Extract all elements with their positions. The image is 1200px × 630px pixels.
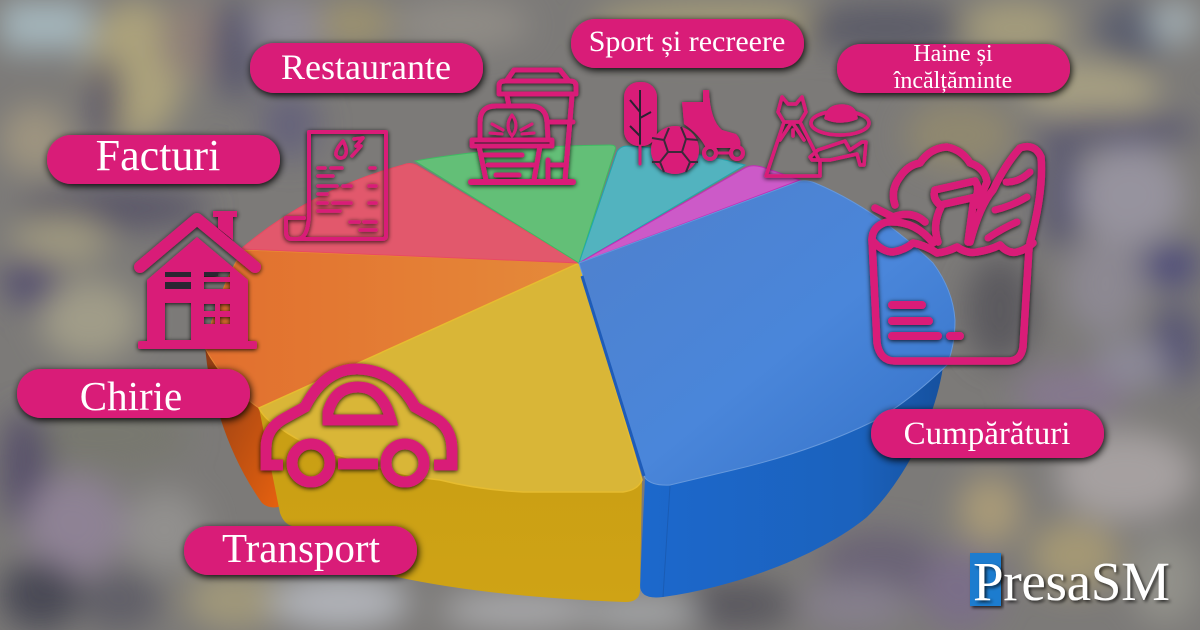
logo blue box (970, 553, 1001, 606)
pill: Haine și încălțăminte: Haine și (913, 41, 993, 67)
pill: Facturi: Facturi (96, 131, 220, 180)
red slice (241, 164, 579, 263)
pill: Haine și încălțăminte: încălțăminte (893, 68, 1012, 94)
blue slice (579, 181, 955, 485)
orange slice (205, 250, 579, 408)
blue side seam (663, 486, 670, 597)
pill: Sport și recreere: Sport și recreere (589, 25, 785, 58)
logo: PresaSM (970, 551, 1170, 612)
window shadows (165, 272, 218, 289)
orange slice side (205, 345, 282, 507)
icon: food and coffee (471, 70, 576, 182)
pill: Restaurante (250, 43, 483, 93)
icon: groceries (872, 147, 1042, 361)
icon: bill (286, 132, 386, 239)
walls with windows (147, 237, 248, 341)
chimney (213, 211, 237, 240)
magenta slice (579, 166, 800, 263)
yellow slice side (259, 408, 642, 602)
base (138, 341, 257, 349)
pill: Cumpărături (871, 409, 1104, 458)
yellow slice (259, 263, 642, 492)
roof (140, 219, 255, 267)
pill: Transport (184, 525, 417, 575)
pill: Sport și recreere (571, 19, 804, 68)
blue slice side (640, 340, 950, 598)
ball (651, 126, 699, 174)
pill: Facturi (47, 131, 280, 184)
pill: Restaurante: Restaurante (281, 47, 451, 87)
icon: car (266, 369, 452, 482)
green slice (415, 145, 615, 263)
logo text: PresaSM (973, 551, 1170, 612)
pie chart (205, 145, 955, 602)
pill: Haine și încălțăminte (837, 41, 1070, 94)
pill: Chirie (17, 369, 250, 419)
blue bevel (582, 276, 644, 476)
skate (682, 90, 740, 148)
icon: clothes (766, 97, 869, 176)
pill: Chirie: Chirie (80, 373, 182, 419)
pill: Cumpărături: Cumpărături (904, 416, 1070, 452)
tree (624, 82, 657, 146)
icon: house (138, 211, 257, 349)
teal slice (579, 146, 745, 263)
icon: sport (624, 82, 743, 174)
pill: Transport: Transport (222, 525, 381, 571)
